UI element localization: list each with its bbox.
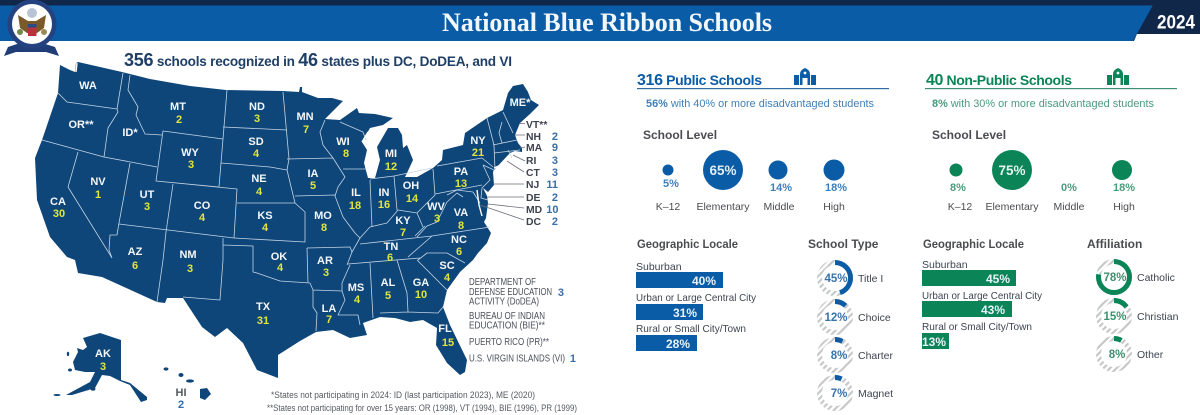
bar chart: geographic locale: Urban or Large Central City bbox=[636, 292, 757, 304]
label: IL: 18 bbox=[349, 200, 361, 212]
callout: BIE bbox=[469, 311, 545, 332]
heading: geographic locale: Geographic Locale bbox=[637, 237, 738, 251]
label: ID: ID* bbox=[122, 127, 138, 139]
label: UT: 3 bbox=[144, 201, 150, 213]
bar chart: geographic locale: 13% bbox=[922, 335, 946, 349]
donut chart: Other bbox=[1098, 338, 1164, 370]
donut chart: Catholic: 78% bbox=[1103, 272, 1127, 284]
heading: geographic locale: Geographic Locale bbox=[923, 237, 1024, 251]
bubble chart: school level: 18% bbox=[1113, 182, 1135, 194]
header band bbox=[0, 0, 1200, 41]
label: TN: 6 bbox=[387, 252, 393, 264]
label: PA bbox=[454, 166, 468, 190]
callout: DE: DE bbox=[526, 193, 541, 204]
bubble chart: school level: 18% bbox=[825, 182, 847, 194]
donut chart: Magnet: Magnet bbox=[858, 388, 893, 400]
label: AL bbox=[381, 277, 396, 302]
bar chart: geographic locale: Suburban bbox=[922, 259, 968, 271]
heading: school level: School Level bbox=[932, 128, 1006, 142]
label: NE bbox=[251, 173, 267, 198]
callout: DE: 2 bbox=[552, 192, 558, 204]
icon: school building bbox=[794, 68, 816, 85]
label: NY bbox=[470, 135, 486, 159]
label: IL: IL bbox=[351, 187, 361, 199]
label: NC: 6 bbox=[456, 246, 462, 258]
bubble chart: school level: Elementary bbox=[985, 201, 1039, 213]
label: CA bbox=[50, 196, 66, 220]
panel: non-public schools bbox=[922, 68, 1179, 370]
label: MN bbox=[296, 111, 314, 136]
label: MI: MI bbox=[385, 148, 397, 160]
label: FL bbox=[438, 323, 454, 349]
label: NM: 3 bbox=[187, 263, 193, 275]
label: WI: 8 bbox=[343, 148, 349, 160]
donut chart: Christian bbox=[1098, 300, 1179, 332]
label: CO: CO bbox=[194, 200, 211, 212]
label: MS: 4 bbox=[354, 294, 361, 306]
bubble chart: school level: 5% bbox=[663, 178, 679, 190]
label: GA: 10 bbox=[415, 289, 427, 301]
label: LA: 7 bbox=[326, 314, 332, 326]
label: IA bbox=[308, 168, 319, 192]
heading: school type: School Type bbox=[808, 237, 879, 251]
label: NM: NM bbox=[179, 249, 197, 261]
callout: NJ: 11 bbox=[546, 179, 558, 191]
callout: MD: MD bbox=[526, 205, 543, 216]
callout: RI bbox=[526, 155, 558, 167]
callout: NJ: NJ bbox=[526, 180, 540, 191]
donut chart: Title I bbox=[820, 262, 883, 294]
label: MO bbox=[314, 210, 332, 234]
label: NY: 21 bbox=[472, 147, 484, 159]
callout: DoDEA: DEPARTMENT OF bbox=[469, 277, 536, 288]
rule bbox=[637, 88, 889, 89]
footnote: not participating in 2024: *States not participating in 2024: ID (last participation 2023), ME (2020) bbox=[271, 390, 535, 400]
label: PA: 13 bbox=[455, 178, 467, 190]
leader lines bbox=[480, 124, 525, 220]
label: IL bbox=[349, 187, 361, 212]
bubble chart: school level bbox=[948, 150, 1135, 213]
label: CO: 4 bbox=[199, 212, 206, 224]
label: TX bbox=[256, 301, 271, 327]
callout: MA: MA bbox=[526, 143, 543, 154]
callout: CT: 3 bbox=[552, 167, 558, 179]
label: MO: 8 bbox=[321, 222, 327, 234]
label: AR bbox=[317, 255, 333, 279]
callout: NH bbox=[526, 131, 558, 143]
footnotes bbox=[267, 390, 577, 413]
donut chart: Christian: Christian bbox=[1137, 311, 1179, 323]
donut chart: Other: Other bbox=[1137, 349, 1164, 361]
callout: MA: 9 bbox=[552, 142, 558, 154]
heading: public schools: 316 Public Schools bbox=[637, 72, 762, 89]
bubble chart: school level: 14% bbox=[770, 182, 792, 194]
year badge: 2024 bbox=[1157, 12, 1195, 34]
bar chart: geographic locale bbox=[922, 259, 1043, 349]
map: United States bbox=[35, 62, 539, 402]
label: KY bbox=[395, 215, 411, 239]
label: UT bbox=[140, 189, 155, 213]
callout: Puerto Rico: PUERTO RICO (PR)** bbox=[469, 337, 549, 348]
label: MS bbox=[348, 282, 364, 306]
donut chart: Choice: Choice bbox=[858, 312, 891, 324]
callout: BIE: BUREAU OF INDIAN bbox=[469, 311, 545, 322]
label: OH: OH bbox=[403, 180, 419, 192]
label: MI bbox=[385, 148, 397, 173]
callout: DoDEA bbox=[469, 277, 564, 308]
bar chart: geographic locale: 31% bbox=[673, 306, 697, 320]
callout: Virgin Islands: U.S. VIRGIN ISLANDS (VI) bbox=[469, 354, 565, 364]
callout: NJ bbox=[526, 179, 558, 191]
callout: BIE: EDUCATION (BIE)** bbox=[469, 320, 545, 332]
state borders bbox=[42, 73, 520, 331]
label: ND bbox=[249, 101, 265, 125]
label: WY bbox=[181, 147, 200, 171]
callout: MA bbox=[526, 142, 558, 154]
label: MS: MS bbox=[348, 282, 364, 294]
label: KY: 7 bbox=[400, 227, 406, 239]
label: MN: MN bbox=[296, 111, 314, 123]
label: GA: GA bbox=[413, 277, 429, 289]
callouts: northeast states bbox=[480, 120, 558, 228]
Alaska shape bbox=[54, 333, 147, 402]
label: CA: 30 bbox=[53, 208, 65, 220]
label: SC: SC bbox=[439, 260, 455, 272]
label: LA: LA bbox=[322, 303, 336, 315]
donut chart: Charter bbox=[820, 340, 894, 370]
callout: RI: RI bbox=[526, 156, 537, 167]
label: WV bbox=[427, 201, 446, 225]
donut chart: Choice: 12% bbox=[824, 312, 848, 324]
label: NC bbox=[451, 234, 467, 258]
bubble chart: school level: 8% bbox=[950, 182, 966, 194]
label: CO bbox=[194, 200, 211, 224]
state labels bbox=[50, 80, 531, 411]
label: ND: ND bbox=[249, 101, 265, 113]
label: NV: 1 bbox=[95, 189, 101, 201]
bar chart: geographic locale: Suburban bbox=[636, 261, 682, 273]
callout: DC: 2 bbox=[552, 216, 558, 228]
label: IA: 5 bbox=[310, 180, 316, 192]
label: AK: 3 bbox=[100, 361, 106, 373]
bar chart: geographic locale: 45% bbox=[986, 272, 1010, 286]
subheading: 8% with 30% or more disadvantaged students bbox=[932, 98, 1155, 110]
label: NC: NC bbox=[451, 234, 467, 246]
callout: CT bbox=[526, 167, 558, 179]
label: WA: WA bbox=[79, 80, 97, 92]
label: FL: 15 bbox=[442, 337, 454, 349]
callout: VT: VT** bbox=[526, 120, 548, 131]
panel: public schools bbox=[636, 68, 894, 408]
bar chart: geographic locale: Urban or Large Central City bbox=[922, 290, 1043, 302]
callout: DoDEA: ACTIVITY (DoDEA) bbox=[469, 296, 539, 308]
donut chart: Title I: Title I bbox=[858, 273, 883, 285]
bubble chart: school level: High bbox=[1113, 201, 1135, 213]
callout: DE bbox=[526, 192, 558, 204]
label: WI: WI bbox=[336, 136, 350, 148]
bubble chart: school level: High bbox=[823, 201, 845, 213]
label: VA: VA bbox=[454, 207, 468, 219]
heading: non-public schools: 40 Non-Public Schools bbox=[926, 72, 1072, 89]
bubble chart: school level: 0% bbox=[1061, 182, 1077, 194]
label: KY: KY bbox=[395, 215, 411, 227]
label: OK bbox=[271, 251, 287, 274]
label: NE: NE bbox=[251, 173, 267, 185]
donut chart: Christian: 15% bbox=[1103, 311, 1127, 323]
label: KS bbox=[257, 210, 273, 234]
label: AZ: AZ bbox=[128, 246, 143, 258]
label: UT: UT bbox=[140, 189, 155, 201]
label: AZ: 6 bbox=[132, 260, 138, 272]
label: HI bbox=[176, 387, 186, 411]
label: TN bbox=[384, 241, 398, 264]
contiguous states shape bbox=[35, 62, 539, 378]
label: AK: AK bbox=[95, 348, 111, 360]
label: OK: 4 bbox=[277, 262, 284, 274]
label: PA: PA bbox=[454, 166, 468, 178]
label: TX: TX bbox=[256, 301, 271, 313]
bubble chart: school level: Middle bbox=[1054, 201, 1085, 213]
label: ME: ME* bbox=[510, 97, 531, 109]
callout: DoDEA: DEFENSE EDUCATION bbox=[469, 287, 552, 298]
label: FL: FL bbox=[438, 323, 452, 335]
icon: presidential seal bbox=[4, 0, 59, 56]
label: SC bbox=[439, 260, 455, 284]
label: SD bbox=[248, 136, 264, 160]
bar chart: geographic locale: 43% bbox=[981, 303, 1005, 317]
Hawaii shape bbox=[164, 367, 211, 400]
label: MN: 7 bbox=[303, 124, 309, 136]
callout: DC: DC bbox=[526, 217, 542, 228]
label: VA: 8 bbox=[458, 220, 464, 232]
map heading: 356 schools recognized in 46 states plus DC, DoDEA, and VI bbox=[124, 50, 512, 70]
label: NV bbox=[90, 176, 106, 201]
label: NV: NV bbox=[90, 176, 106, 188]
callout: CT: CT bbox=[526, 168, 541, 179]
label: OR: OR** bbox=[68, 119, 94, 131]
donut chart: Catholic: Catholic bbox=[1137, 272, 1175, 284]
bubble chart: school level bbox=[656, 150, 847, 213]
label: GA bbox=[413, 277, 429, 301]
title: National Blue Ribbon Schools bbox=[442, 8, 772, 37]
label: AK bbox=[95, 348, 111, 373]
heading: school level: School Level bbox=[643, 128, 717, 142]
callout: RI: 3 bbox=[552, 155, 558, 167]
label: VA bbox=[454, 207, 468, 232]
donut chart: Charter: 8% bbox=[831, 350, 847, 362]
label: SD: SD bbox=[248, 136, 264, 148]
icon: school building bbox=[1107, 68, 1129, 85]
bar chart: geographic locale: 28% bbox=[666, 337, 690, 351]
footnote: not participating over 15 years: **States not participating for over 15 years: OR (1998), VT (1994), BIE (1996), PR (1999) bbox=[267, 403, 577, 413]
bar chart: geographic locale: Rural or Small City/Town bbox=[922, 321, 1032, 333]
callout: MD bbox=[526, 204, 558, 216]
label: MT: MT bbox=[170, 101, 186, 113]
label: IN: 16 bbox=[378, 199, 390, 211]
label: OK: OK bbox=[271, 251, 287, 263]
bar chart: geographic locale: 40% bbox=[692, 274, 716, 288]
label: KS: KS bbox=[257, 210, 273, 222]
label: AZ bbox=[128, 246, 143, 272]
label: WV: WV bbox=[427, 201, 446, 213]
label: TX: 31 bbox=[257, 315, 269, 327]
label: WY: 3 bbox=[188, 159, 194, 171]
label: WV: 3 bbox=[434, 213, 440, 225]
label: CA: CA bbox=[50, 196, 66, 208]
label: AL: AL bbox=[381, 277, 396, 289]
label: SD: 4 bbox=[253, 148, 260, 160]
label: MO: MO bbox=[314, 210, 332, 222]
label: AR: AR bbox=[317, 255, 333, 267]
label: LA bbox=[322, 303, 336, 326]
label: AL: 5 bbox=[385, 290, 391, 302]
label: MI: 12 bbox=[385, 161, 397, 173]
callout: Virgin Islands: 1 bbox=[570, 353, 576, 365]
callout: NH: 2 bbox=[552, 131, 558, 143]
bubble chart: school level: K–12 bbox=[948, 201, 972, 213]
label: IN: IN bbox=[378, 187, 390, 199]
bar chart: geographic locale: Rural or Small City/Town bbox=[636, 323, 746, 335]
label: OH: 14 bbox=[406, 193, 419, 205]
label: KS: 4 bbox=[262, 222, 269, 234]
bubble chart: school level: 75% bbox=[998, 163, 1026, 178]
label: NY: NY bbox=[470, 135, 486, 147]
label: IA: IA bbox=[308, 168, 319, 180]
callouts: other jurisdictions bbox=[469, 277, 576, 365]
coastal water details bbox=[76, 63, 508, 216]
donut chart: Choice bbox=[820, 302, 891, 332]
label: IN bbox=[378, 187, 390, 211]
label: NE: 4 bbox=[256, 186, 263, 198]
donut chart: Magnet: 7% bbox=[831, 388, 847, 400]
label: HI: HI bbox=[176, 387, 186, 399]
rule bbox=[925, 88, 1177, 89]
callout: MD: 10 bbox=[546, 204, 558, 216]
label: TN: TN bbox=[384, 241, 398, 253]
donut chart: Catholic bbox=[1098, 262, 1175, 292]
bubble chart: school level: K–12 bbox=[656, 201, 680, 213]
label: MT bbox=[170, 101, 186, 126]
label: NM bbox=[179, 249, 197, 275]
subheading: 56% with 40% or more disadvantaged students bbox=[646, 98, 875, 110]
donut chart: Other: 8% bbox=[1109, 349, 1125, 361]
label: MT: 2 bbox=[176, 114, 182, 126]
donut chart: Magnet bbox=[820, 378, 893, 408]
heading: affiliation: Affiliation bbox=[1087, 237, 1142, 251]
callout: DC bbox=[526, 216, 558, 228]
label: WI bbox=[336, 136, 350, 160]
label: OH bbox=[403, 180, 419, 205]
donut chart: Charter: Charter bbox=[858, 350, 894, 362]
label: AR: 3 bbox=[323, 267, 329, 279]
bubble chart: school level: Elementary bbox=[696, 201, 750, 213]
bubble chart: school level: 65% bbox=[709, 163, 737, 178]
label: HI: 2 bbox=[178, 399, 184, 411]
callout: NH: NH bbox=[526, 132, 541, 143]
callout: DoDEA: 3 bbox=[558, 287, 564, 299]
label: SC: 4 bbox=[444, 272, 451, 284]
label: ND: 3 bbox=[254, 113, 260, 125]
bubble chart: school level: Middle bbox=[764, 201, 795, 213]
bar chart: geographic locale bbox=[636, 261, 757, 351]
donut chart: Title I: 45% bbox=[824, 273, 848, 285]
label: WY: WY bbox=[181, 147, 200, 159]
